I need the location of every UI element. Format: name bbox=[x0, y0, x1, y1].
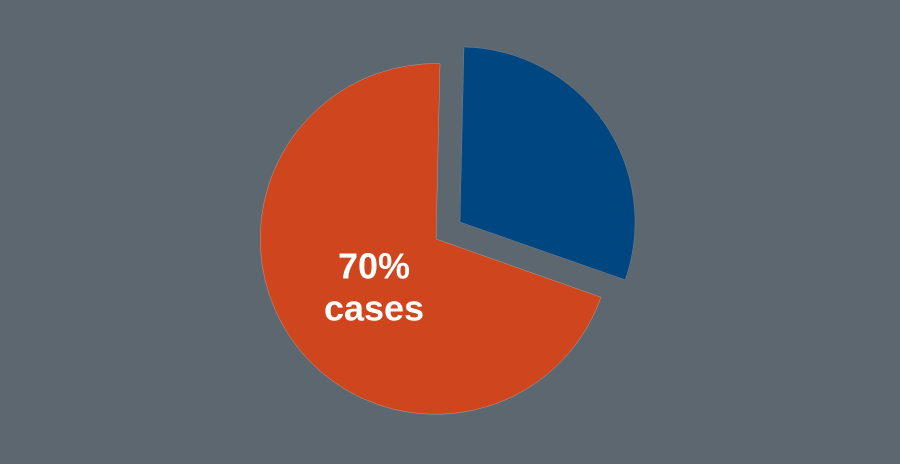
label: 70% cases: cases bbox=[324, 288, 424, 328]
label: 70% cases: 70% bbox=[338, 246, 410, 286]
slice: 30% exploded bbox=[460, 47, 635, 280]
label: 70% cases bbox=[324, 246, 424, 328]
slice: 70% cases bbox=[260, 64, 601, 414]
